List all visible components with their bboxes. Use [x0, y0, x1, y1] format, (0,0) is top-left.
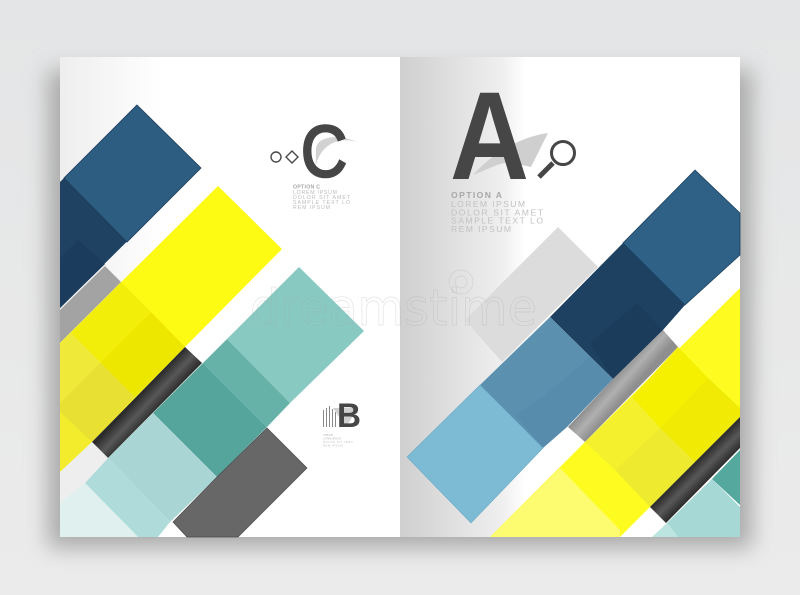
teal block	[60, 267, 364, 537]
text block: option B: LOREM IPSUM	[323, 436, 342, 440]
pale wedge	[60, 442, 108, 503]
icon: diamond	[286, 151, 298, 163]
text block: option A: LOREM IPSUM	[451, 199, 525, 209]
icon: magnifier	[539, 142, 574, 177]
dark blue block	[60, 105, 201, 308]
navy block	[550, 170, 740, 379]
grey strip	[60, 266, 121, 343]
text block: option C	[293, 184, 351, 211]
heading: B: B	[337, 397, 361, 435]
panel: left page	[60, 57, 400, 537]
black strip	[92, 347, 202, 458]
text block: option A: SAMPLE TEXT LO	[451, 216, 543, 226]
text block: option C: LOREM IPSUM	[293, 190, 337, 196]
yellow block	[490, 288, 740, 537]
panel: right page	[400, 57, 740, 537]
text block: option C: REM IPSUM	[293, 205, 330, 211]
text block: option A	[451, 190, 544, 234]
teal corner	[652, 450, 740, 537]
text block: option A: DOLOR SIT AMET	[451, 208, 544, 218]
black strip	[650, 417, 740, 523]
text block: option C: OPTION C	[293, 184, 320, 190]
icon: circle	[271, 152, 281, 162]
light grey block	[465, 227, 598, 362]
text block: option A: REM IPSUM	[451, 224, 511, 234]
text block: option B	[323, 433, 353, 448]
grey block	[173, 428, 307, 537]
icon: bars	[324, 406, 336, 427]
heading: A: A	[450, 67, 529, 206]
grey strip	[568, 330, 678, 442]
text block: option B: REM IPSUM	[323, 444, 344, 448]
heading: C: C	[301, 112, 347, 192]
text block: option B: DOLOR SIT AMET	[323, 440, 353, 444]
text block: option A: OPTION A	[451, 190, 502, 200]
text block: option C: DOLOR SIT AMET	[293, 195, 351, 201]
steel blue block	[407, 317, 613, 523]
yellow block	[60, 186, 282, 472]
page shadow	[48, 70, 752, 548]
pale lower wedge	[400, 320, 502, 537]
watermark: dreamstime	[250, 279, 537, 337]
text block: option B: OPTION B	[323, 433, 333, 437]
text block: option C: SAMPLE TEXT LO	[293, 200, 350, 206]
